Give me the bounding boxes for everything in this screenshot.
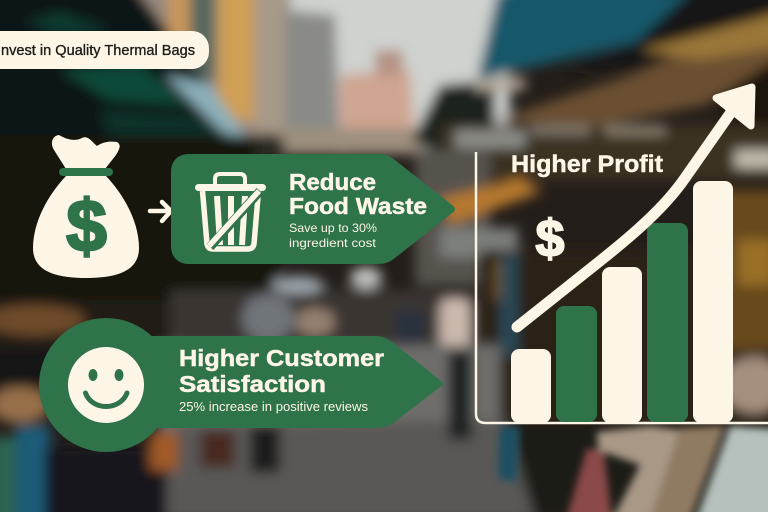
text: higher customer satisfaction: Higher Customer <box>179 345 384 371</box>
chart: higher profit <box>476 87 768 423</box>
text: reduce food waste <box>289 169 427 250</box>
icon: dollar sign: $ <box>536 210 565 268</box>
heading: higher profit: Higher Profit <box>511 151 663 178</box>
title pill <box>0 31 209 69</box>
text: reduce food waste: ingredient cost <box>289 236 377 250</box>
text: higher customer satisfaction: Satisfaction <box>179 371 326 397</box>
panel: higher customer satisfaction <box>39 318 443 452</box>
bar 2 <box>556 306 597 422</box>
bar 3 <box>602 267 642 423</box>
panel: reduce food waste <box>171 154 455 264</box>
icon: money bag <box>33 135 139 278</box>
arrow: bag to food waste <box>150 202 171 221</box>
text: reduce food waste: Food Waste <box>289 193 427 219</box>
icon: crossed-out trash bin <box>195 174 266 249</box>
icon: smiley face <box>68 347 144 423</box>
icon: money bag: $ <box>66 186 107 267</box>
text: reduce food waste: Save up to 30% <box>289 221 377 235</box>
text: reduce food waste: Reduce <box>289 169 376 195</box>
text: higher customer satisfaction: 25% increase in positive reviews <box>179 400 368 414</box>
text: higher customer satisfaction <box>179 345 384 414</box>
title pill: Invest in Quality Thermal Bags <box>0 42 195 59</box>
bar 4 <box>647 223 688 422</box>
bar 5 <box>693 181 733 423</box>
bar 1 <box>511 349 551 423</box>
arrow: rising trend <box>517 87 752 327</box>
